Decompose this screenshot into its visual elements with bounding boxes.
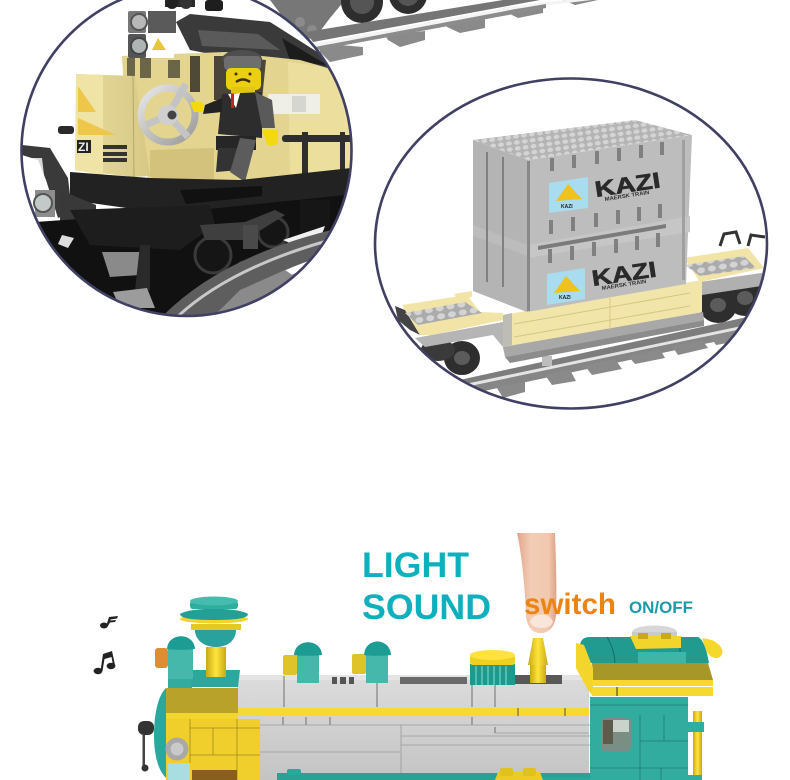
front dome bbox=[155, 636, 195, 679]
smokebox bbox=[154, 688, 260, 780]
upper KAZI logo: KAZI bbox=[561, 204, 573, 210]
container vent ribs bbox=[548, 142, 664, 263]
track under wagon bbox=[462, 318, 744, 398]
lower KAZI logo: KAZI bbox=[559, 295, 571, 301]
lower KAZI logo bbox=[547, 261, 656, 305]
lower KAZI logo: MAERSK TRAIN bbox=[601, 279, 647, 292]
switch pin bbox=[515, 638, 562, 684]
stacked containers bbox=[473, 120, 692, 312]
music note small bbox=[100, 616, 118, 628]
upper KAZI logo bbox=[549, 172, 660, 213]
panel: locomotive close-up circle bbox=[22, 0, 360, 340]
handrail bbox=[282, 132, 350, 174]
lower running board bbox=[277, 768, 590, 780]
front tan block with logo bbox=[75, 74, 214, 185]
container sides and top bbox=[473, 120, 692, 312]
upper KAZI logo: KAZI bbox=[593, 167, 662, 202]
flatcar right deck bbox=[684, 232, 768, 295]
curved track bbox=[166, 226, 330, 315]
whistle horn bbox=[702, 638, 722, 658]
toothed gold-top cylinder bbox=[470, 650, 515, 685]
minifigure driver bbox=[190, 50, 278, 182]
front tan block with logo: ZI bbox=[78, 140, 89, 154]
background track behind locomotive close-up bbox=[270, 0, 600, 62]
label: on/off: ON/OFF bbox=[629, 598, 693, 617]
flatcar left deck bbox=[395, 291, 503, 347]
undercarriage and bogie bbox=[35, 195, 345, 315]
second dome bbox=[283, 642, 322, 683]
cab bbox=[590, 697, 688, 780]
chimney bbox=[168, 596, 248, 688]
music note large bbox=[94, 651, 115, 674]
flatcar centre beam bbox=[503, 280, 704, 363]
front pull handle bbox=[138, 721, 154, 772]
heading: light sound: LIGHT bbox=[362, 545, 469, 585]
cab top button bbox=[630, 626, 681, 649]
lower KAZI logo: KAZI bbox=[590, 257, 658, 291]
roof of locomotive bbox=[165, 0, 328, 68]
boiler bbox=[237, 675, 590, 780]
third dome bbox=[352, 642, 391, 683]
side post bbox=[687, 711, 704, 780]
silver hand wheel bbox=[141, 84, 195, 142]
wagon bogies bbox=[421, 280, 764, 375]
upper KAZI logo: MAERSK TRAIN bbox=[604, 190, 650, 203]
headlights and logo plate bbox=[128, 11, 176, 58]
cab roof bbox=[576, 637, 713, 696]
front round button bbox=[166, 738, 188, 760]
heading: light sound bbox=[362, 545, 491, 627]
heading: light sound: SOUND bbox=[362, 587, 491, 627]
cab body bbox=[122, 52, 352, 182]
black chassis deck bbox=[22, 126, 352, 225]
finger pressing the switch bbox=[517, 533, 556, 633]
label: switch: switch bbox=[524, 588, 616, 621]
panel: container wagon close-up ellipse bbox=[375, 78, 770, 408]
steam locomotive illustration bbox=[138, 596, 722, 780]
